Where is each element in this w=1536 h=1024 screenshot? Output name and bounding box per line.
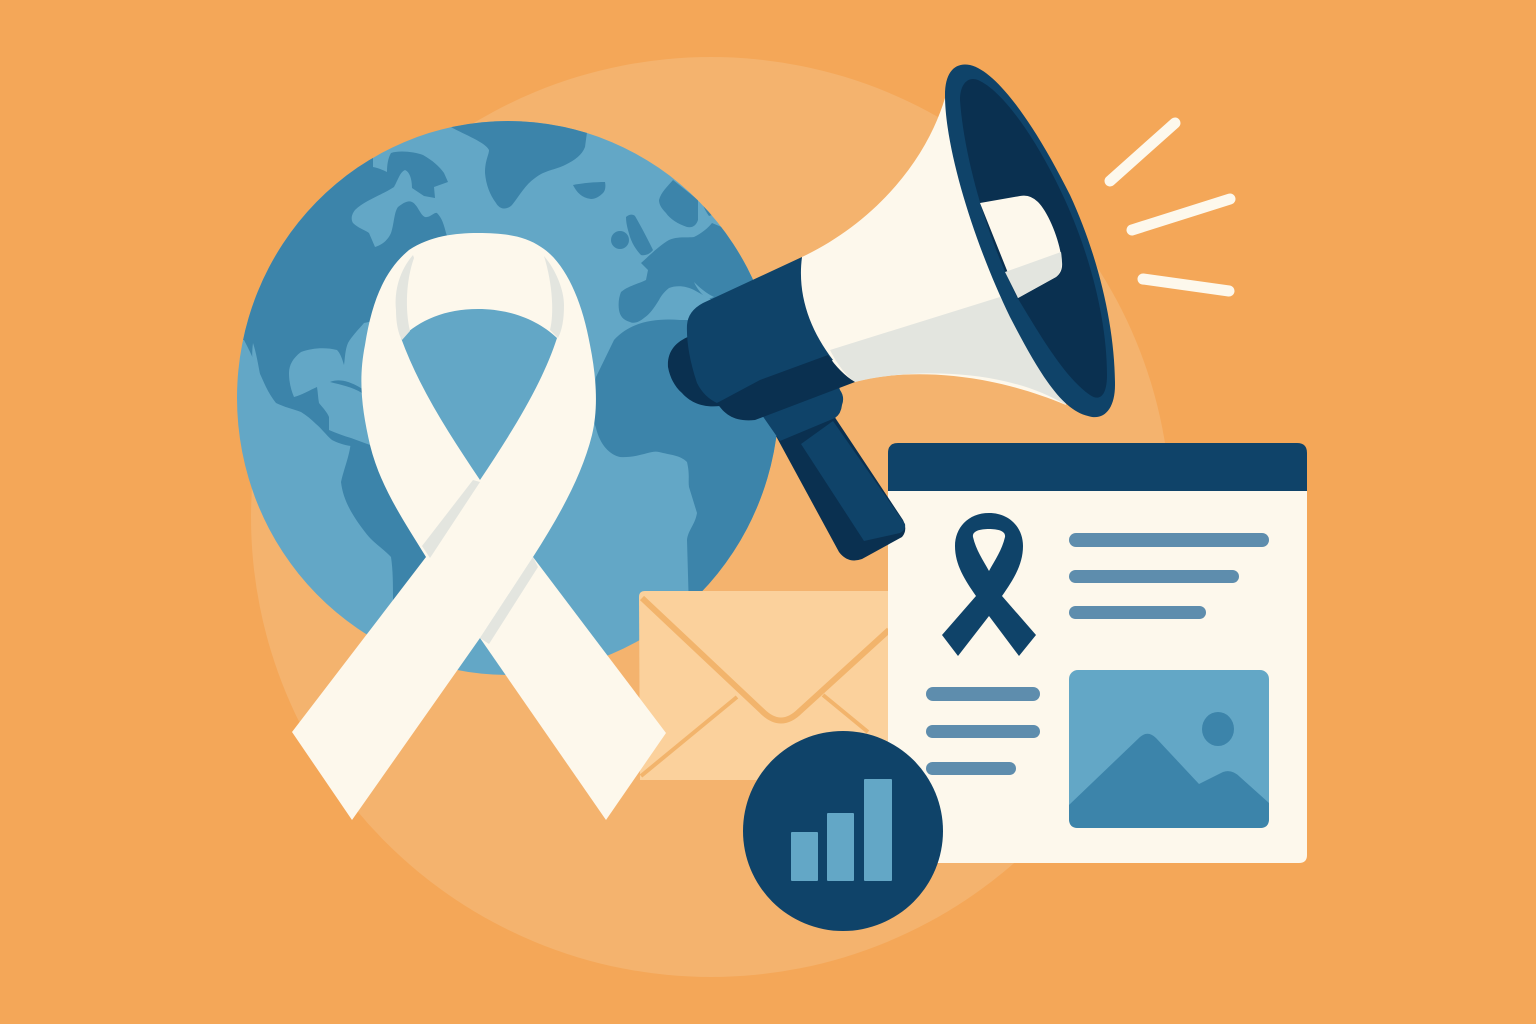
- image placeholder: [1069, 670, 1269, 828]
- globe: [225, 110, 800, 675]
- land: inland sea sliver: [694, 282, 714, 299]
- illustration: awareness campaign: [237, 57, 1307, 977]
- sound wave lines: [1110, 123, 1230, 291]
- megaphone lower band: [717, 355, 855, 420]
- megaphone inner cone shade: [1005, 252, 1062, 298]
- card header: [888, 443, 1307, 491]
- megaphone mouth: [960, 79, 1107, 398]
- land: eurasia: [618, 223, 753, 323]
- ribbon: [292, 233, 666, 820]
- megaphone horn: [800, 98, 1066, 405]
- megaphone handle face: [801, 421, 905, 541]
- land: arctic sliver: [703, 206, 712, 216]
- megaphone handle: [776, 410, 905, 560]
- land: caribbean island: [330, 380, 364, 393]
- land: arctic island: [659, 180, 698, 227]
- land: greenland: [451, 121, 587, 208]
- megaphone body: [687, 257, 833, 403]
- land: ireland: [611, 231, 629, 249]
- ribbon: shadow crossing lower: [480, 557, 538, 644]
- land: small sliver west: [252, 344, 260, 374]
- land: africa and middle east: [594, 320, 776, 591]
- land: north america: [243, 152, 448, 446]
- land: south america: [341, 445, 426, 600]
- text lines left: [926, 687, 1040, 775]
- ribbon: front leg: [292, 480, 533, 820]
- text lines right: [1069, 533, 1269, 619]
- megaphone back cap: [668, 336, 720, 406]
- megaphone inner cone: [980, 196, 1062, 298]
- envelope: [639, 591, 890, 780]
- ribbon: shadow left: [396, 255, 414, 340]
- background circle: [251, 57, 1171, 977]
- land: britain: [626, 215, 653, 255]
- megaphone handle collar: [755, 375, 843, 441]
- ribbon: shadow right: [544, 256, 564, 338]
- land: small atlantic island: [573, 182, 605, 199]
- chart badge: [743, 731, 943, 931]
- megaphone: [668, 64, 1115, 560]
- small ribbon icon: [942, 513, 1036, 656]
- megaphone rim: [945, 64, 1115, 417]
- bar chart: [791, 779, 892, 881]
- card body: [888, 480, 1307, 863]
- ribbon: back leg: [480, 557, 666, 820]
- megaphone horn shade: [830, 297, 1066, 405]
- ribbon: shadow crossing upper: [422, 480, 480, 558]
- envelope flap lines: [642, 598, 889, 720]
- ribbon: loop: [361, 233, 596, 638]
- web page card: [888, 443, 1307, 863]
- envelope body: [639, 591, 890, 780]
